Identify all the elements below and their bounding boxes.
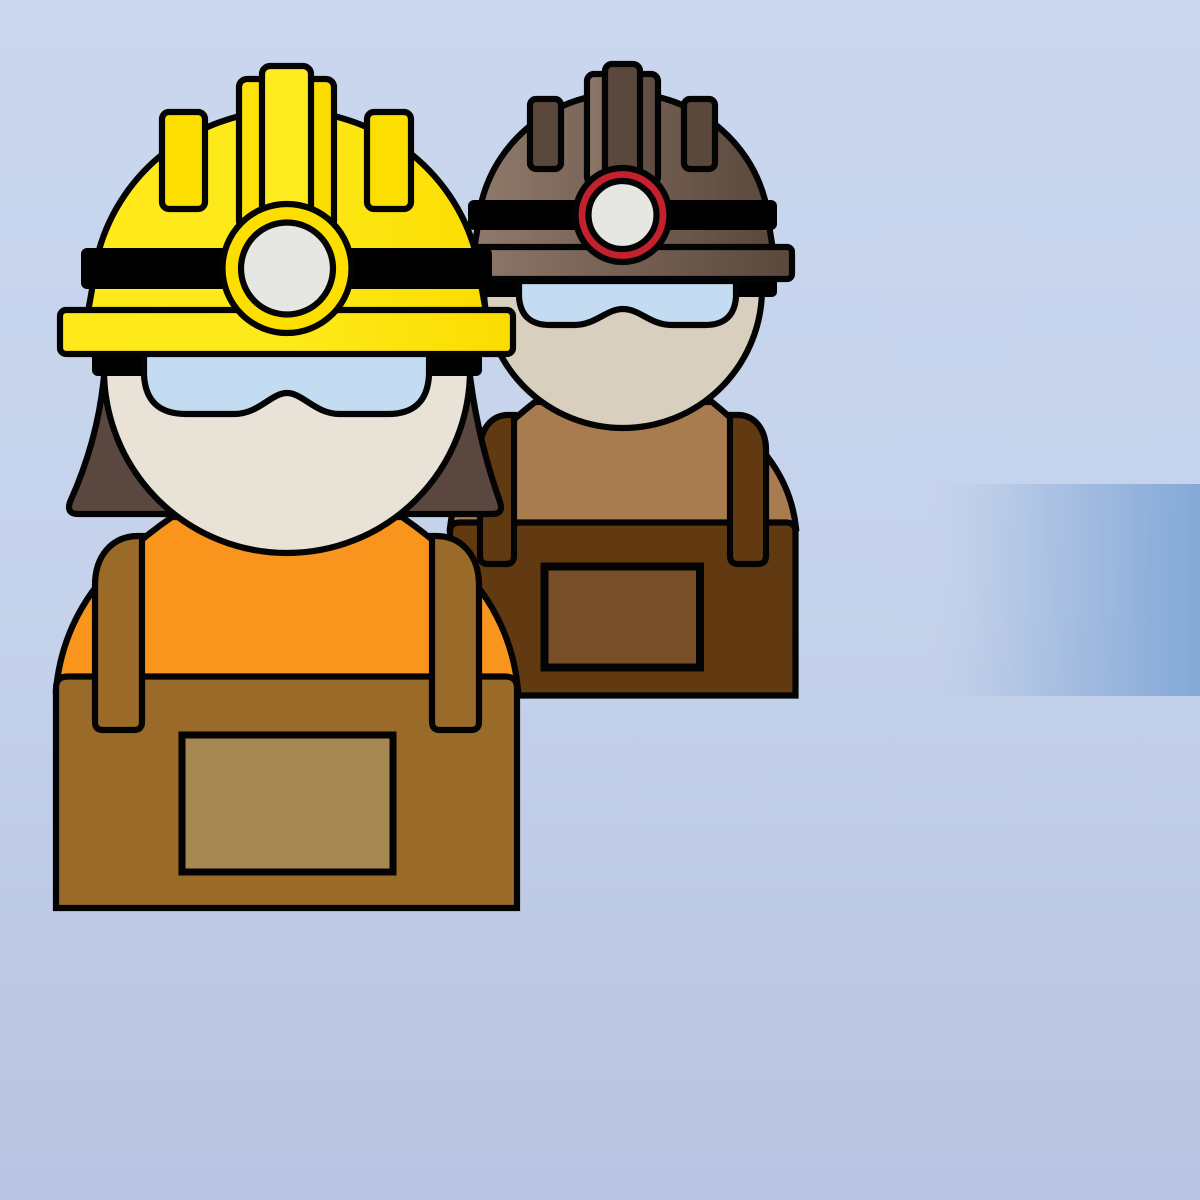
front worker (56, 66, 518, 908)
front worker left strap (95, 536, 142, 730)
front worker right strap (432, 536, 479, 730)
back worker right strap (730, 415, 766, 564)
back worker (450, 64, 796, 696)
back worker left strap (480, 415, 514, 564)
back worker helmet brim (454, 247, 792, 279)
front worker hair (69, 376, 501, 514)
front worker goggle band (92, 345, 482, 376)
back worker lamp (576, 168, 670, 262)
light beam (930, 484, 1200, 696)
front worker head (104, 187, 470, 553)
back worker goggles (519, 281, 736, 325)
front worker pocket (182, 735, 393, 872)
back worker pocket (544, 566, 700, 668)
front worker helmet brim (60, 310, 513, 354)
back worker goggle band (469, 276, 777, 297)
back worker helmet ribs (530, 64, 715, 184)
front worker lamp (222, 204, 352, 333)
front worker helmet band (81, 248, 492, 289)
back worker torso (450, 402, 796, 528)
back worker head (484, 150, 762, 428)
front worker overalls (56, 676, 517, 908)
back worker overalls (450, 522, 796, 696)
back worker helmet band (468, 200, 777, 230)
front worker goggles (144, 352, 429, 414)
front worker helmet dome (88, 110, 486, 312)
front worker helmet ribs (162, 66, 411, 229)
back worker helmet dome (474, 93, 773, 250)
front worker torso (56, 517, 518, 690)
